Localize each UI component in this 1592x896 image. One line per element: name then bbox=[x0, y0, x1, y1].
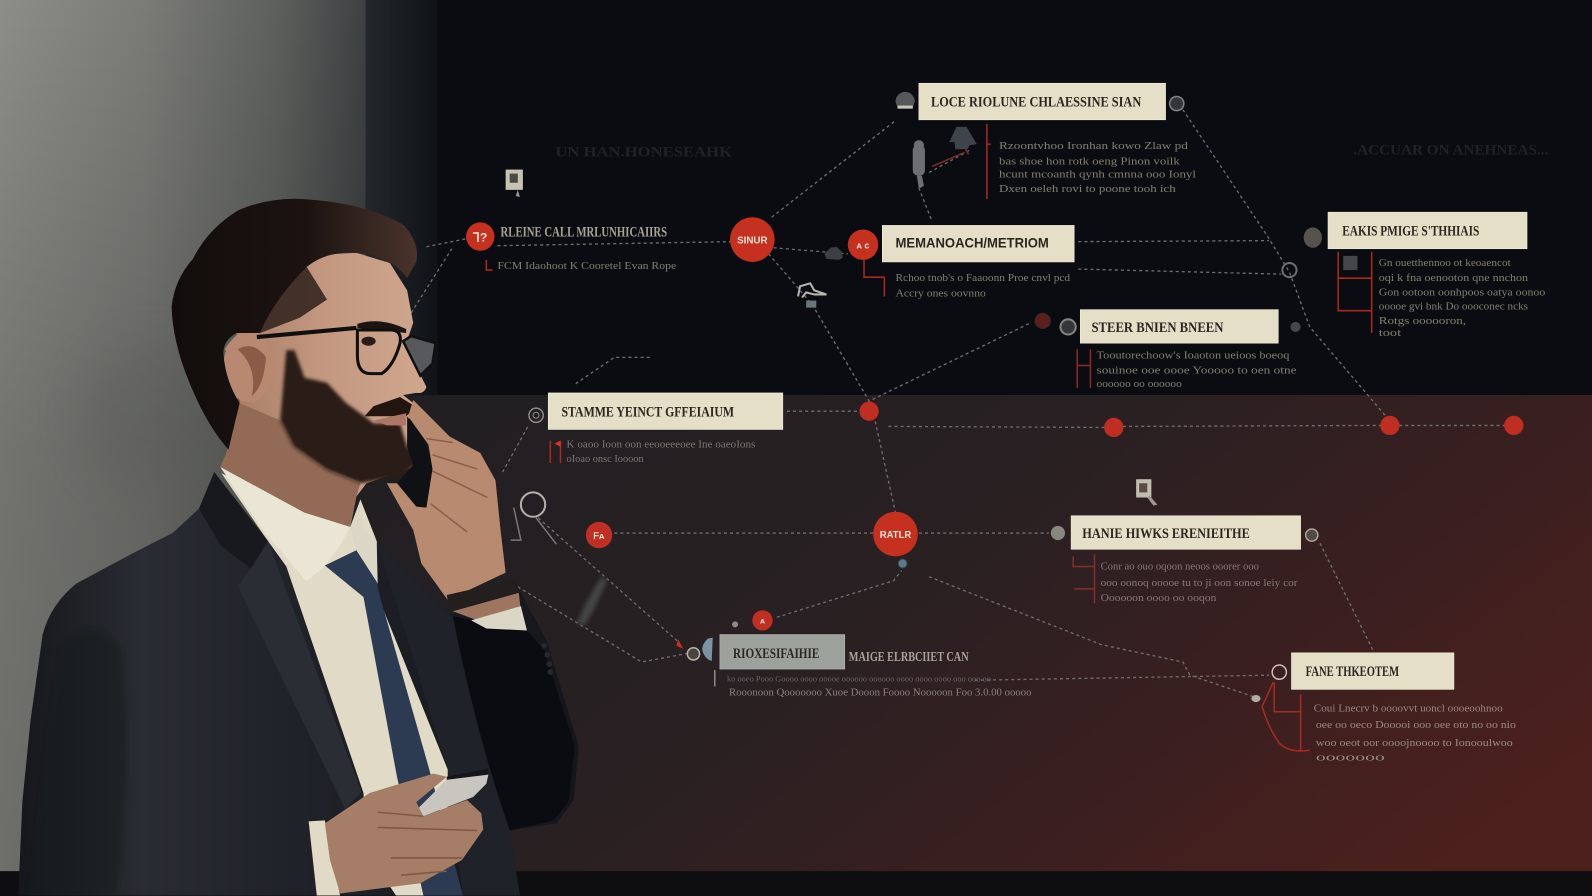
box 3 bbox=[1328, 212, 1527, 249]
jacket right front bbox=[377, 541, 520, 895]
icon: box 3 mini glyph bbox=[1343, 256, 1357, 270]
text: box 4 description: oooooo oo oooooo bbox=[1097, 379, 1182, 390]
node: small red near Memanoach bbox=[848, 229, 878, 260]
text: grey box description: Rooonoon Qooooooo Xuoe Dooon Foooo Nooooon Foo 3.0.00 ooooo bbox=[729, 687, 1032, 698]
watch bbox=[447, 580, 519, 611]
text: box 1 description: Dxen oeleh rovi to poone tooh ich bbox=[999, 184, 1177, 195]
shirt collar right bbox=[350, 500, 378, 584]
eyebrow bbox=[357, 321, 406, 333]
node: large red RATLR bbox=[873, 512, 918, 556]
finger lines bbox=[426, 439, 487, 532]
box 7 grey bbox=[720, 635, 845, 669]
cuff bbox=[471, 606, 527, 630]
shirt collar left bbox=[220, 467, 350, 582]
node: red left middle bbox=[586, 522, 612, 548]
text: box 8 description: oee oo oeco Dooooi ooo oee oto no oo nio bbox=[1316, 720, 1516, 731]
grey box marker line bbox=[714, 670, 716, 686]
box 1 bbox=[919, 83, 1166, 120]
eye bbox=[361, 337, 376, 346]
icon: white bird bbox=[798, 283, 826, 308]
sleeve bbox=[453, 616, 575, 831]
icon: figure bbox=[913, 140, 925, 189]
node: large red SINUR: SINUR bbox=[737, 236, 768, 247]
text: box 4 description: souinoe ooe oooe Yooooo to oen otne bbox=[1097, 366, 1297, 377]
phone at ear bbox=[397, 416, 433, 508]
jacket lapels bbox=[199, 472, 268, 569]
text: call metrics sub line: FCM Idaohoot K Cooretel Evan Rope bbox=[498, 261, 676, 272]
footer strip bbox=[0, 871, 1592, 896]
node: large red SINUR bbox=[730, 217, 775, 262]
figure: businessman on the phone bbox=[18, 199, 579, 895]
box 5 bbox=[548, 393, 783, 429]
node: upper left call node: ꓶ? bbox=[472, 231, 487, 245]
text: box 5 description bbox=[567, 440, 755, 465]
hair bbox=[172, 199, 417, 450]
node: red left middle: ᖴᴀ bbox=[594, 531, 605, 541]
box 1: LOCE RIOLUNE CHLAESSINE SIAN bbox=[931, 94, 1141, 111]
text: box 5 description: oIoao onsc Ioooon bbox=[567, 454, 644, 465]
faint heading right: .ACCUAR ON ANEHNEAS... bbox=[1353, 141, 1549, 158]
text: box 2 description: Rchoo tnob's o Faaoonn Proe cnvl pcd bbox=[896, 273, 1071, 284]
hair fade bbox=[260, 267, 327, 333]
panel: upper dark network area bbox=[438, 0, 1592, 396]
phone in hand bbox=[413, 769, 488, 816]
wrist skin bbox=[453, 593, 521, 621]
text: box 3 description: oqi k fna oenooton qne nnchon bbox=[1379, 273, 1529, 284]
icon: document left bbox=[506, 170, 523, 197]
box 8 bbox=[1291, 653, 1454, 689]
box 4: STEER BNIEN BNEEN bbox=[1091, 319, 1223, 336]
text: box 3 description: Gn ouetthennoo ot keoaencot bbox=[1379, 258, 1511, 269]
text: box 8 description: ooooooo bbox=[1316, 752, 1385, 763]
heading beside grey box: MAIGE ELRBCIIET CAN bbox=[849, 649, 969, 664]
glasses bbox=[257, 328, 400, 374]
text: box 8 description: woo oeot oor oooojnoooo to Ionooulwoo bbox=[1316, 738, 1513, 749]
icon: document lower right bbox=[1136, 479, 1157, 506]
shirt bbox=[221, 473, 448, 895]
beard bbox=[280, 350, 423, 483]
box 3: EAKIS PMIGE S'THHIAIS bbox=[1342, 223, 1479, 240]
sleeve buttons bbox=[541, 643, 553, 675]
jacket bbox=[18, 472, 579, 895]
lower cuff bbox=[309, 820, 340, 895]
node: upper left call node bbox=[466, 222, 494, 251]
mustache bbox=[364, 397, 416, 416]
panel: lower red gradient network area bbox=[350, 395, 1592, 872]
hand lines bbox=[378, 812, 477, 875]
icon: gray hammer bbox=[577, 577, 607, 625]
icon: small house dark near Memanoach bbox=[824, 247, 843, 260]
icons: small gray node markers bbox=[521, 92, 1322, 702]
text: grey box description bbox=[727, 674, 1032, 698]
icon: pointer lines bbox=[511, 508, 556, 544]
text: box 2 description: Accry ones oovnno bbox=[896, 288, 986, 299]
text: box 1 description bbox=[999, 141, 1196, 195]
text: box 5 description: K oaoo Ioon oon eeooeeeoee Ine oaeoIons bbox=[567, 440, 755, 451]
text: grey box description: ko ooeo Pooo Goooo oooo ooooe oooooo oooooo oooo oooo oooo ooo ooo oo bbox=[727, 674, 991, 683]
node: large red RATLR: RATLR bbox=[880, 530, 912, 541]
box 2 bbox=[882, 225, 1074, 262]
far lens bbox=[403, 336, 436, 376]
text: box 3 description: Rotgs oooooron, bbox=[1379, 316, 1466, 327]
node row: red dots on horizontal line bbox=[859, 402, 1523, 437]
icon: house bbox=[949, 127, 977, 149]
text: box 8 description: Coui Lnecrv b oooovvt uoncl oooeoohnoo bbox=[1314, 704, 1503, 715]
icon: red marker bbox=[554, 441, 560, 447]
jacket lower body shadow bbox=[30, 629, 126, 893]
neck and face skin bbox=[220, 253, 426, 527]
neck shadow bbox=[220, 403, 360, 527]
tie bbox=[325, 550, 463, 895]
text: box 6 description: ooo oonoq ooooe tu to ji oon sonoe leiy cor bbox=[1101, 578, 1298, 589]
heading: call metrics: RLEINE CALL MRLUNHICAIIRS bbox=[501, 224, 667, 241]
raised hand bbox=[387, 400, 506, 600]
box 4 bbox=[1080, 310, 1278, 343]
text: box 3 description: Gon ootoon oonhpoos oatya oonoo bbox=[1379, 287, 1545, 298]
text: box 1 description: Rzoontvhoo Ironhan kowo Zlaw pd bbox=[999, 141, 1189, 152]
box 6 bbox=[1071, 516, 1301, 549]
text: box 2 description bbox=[896, 273, 1071, 299]
node: red lower bbox=[752, 610, 773, 630]
lips bbox=[374, 413, 406, 425]
box 8: FANE THKEOTEM bbox=[1306, 664, 1399, 680]
red bracket lines bbox=[486, 124, 1372, 751]
background: screen side band bbox=[366, 0, 439, 396]
box 5: STAMME YEINCT GFFEIAIUM bbox=[561, 403, 734, 420]
ear bbox=[223, 331, 274, 402]
text: box 3 description bbox=[1379, 258, 1545, 339]
text: box 3 description: ooooe gvi bnk Do oooconec ncks bbox=[1379, 302, 1528, 313]
ear over temple bbox=[225, 336, 254, 350]
text: box 6 description: Oooooon oooo oo ooqon bbox=[1101, 593, 1217, 604]
text: box 6 description: Conr ao ouo oqoon neoos ooorer ooo bbox=[1101, 562, 1259, 573]
text: box 1 description: bas shoe hon rotk oeng Pinon voilk bbox=[999, 156, 1181, 167]
text: box 4 description bbox=[1097, 350, 1297, 390]
text: box 8 description bbox=[1314, 704, 1516, 763]
box 7 grey: RIOXESIFAIHIE bbox=[733, 645, 819, 662]
lower hand bbox=[325, 774, 483, 893]
faint heading left: UN HAN.HONESEAHK bbox=[555, 143, 732, 160]
text: box 1 description: hcunt mcoanth qynh cmnna ooo Ionyl bbox=[999, 170, 1196, 181]
text: box 6 description bbox=[1101, 562, 1298, 604]
network dashed connectors bbox=[411, 110, 1505, 699]
node: small red near Memanoach: ᴀ ᴄ bbox=[857, 241, 870, 251]
text: box 4 description: Tooutorechoow's Ioaoton ueioos boeoq bbox=[1097, 350, 1290, 361]
node: red lower: ᴀ bbox=[760, 616, 765, 625]
text: box 3 description: toot bbox=[1379, 328, 1401, 339]
box 2: MEMANOACH/METRIOM bbox=[896, 236, 1049, 252]
node: dim red above Steer bbox=[1035, 313, 1050, 328]
background: concrete wall bbox=[0, 0, 368, 896]
box 6: HANIE HIWKS ERENIEITHE bbox=[1082, 525, 1250, 542]
